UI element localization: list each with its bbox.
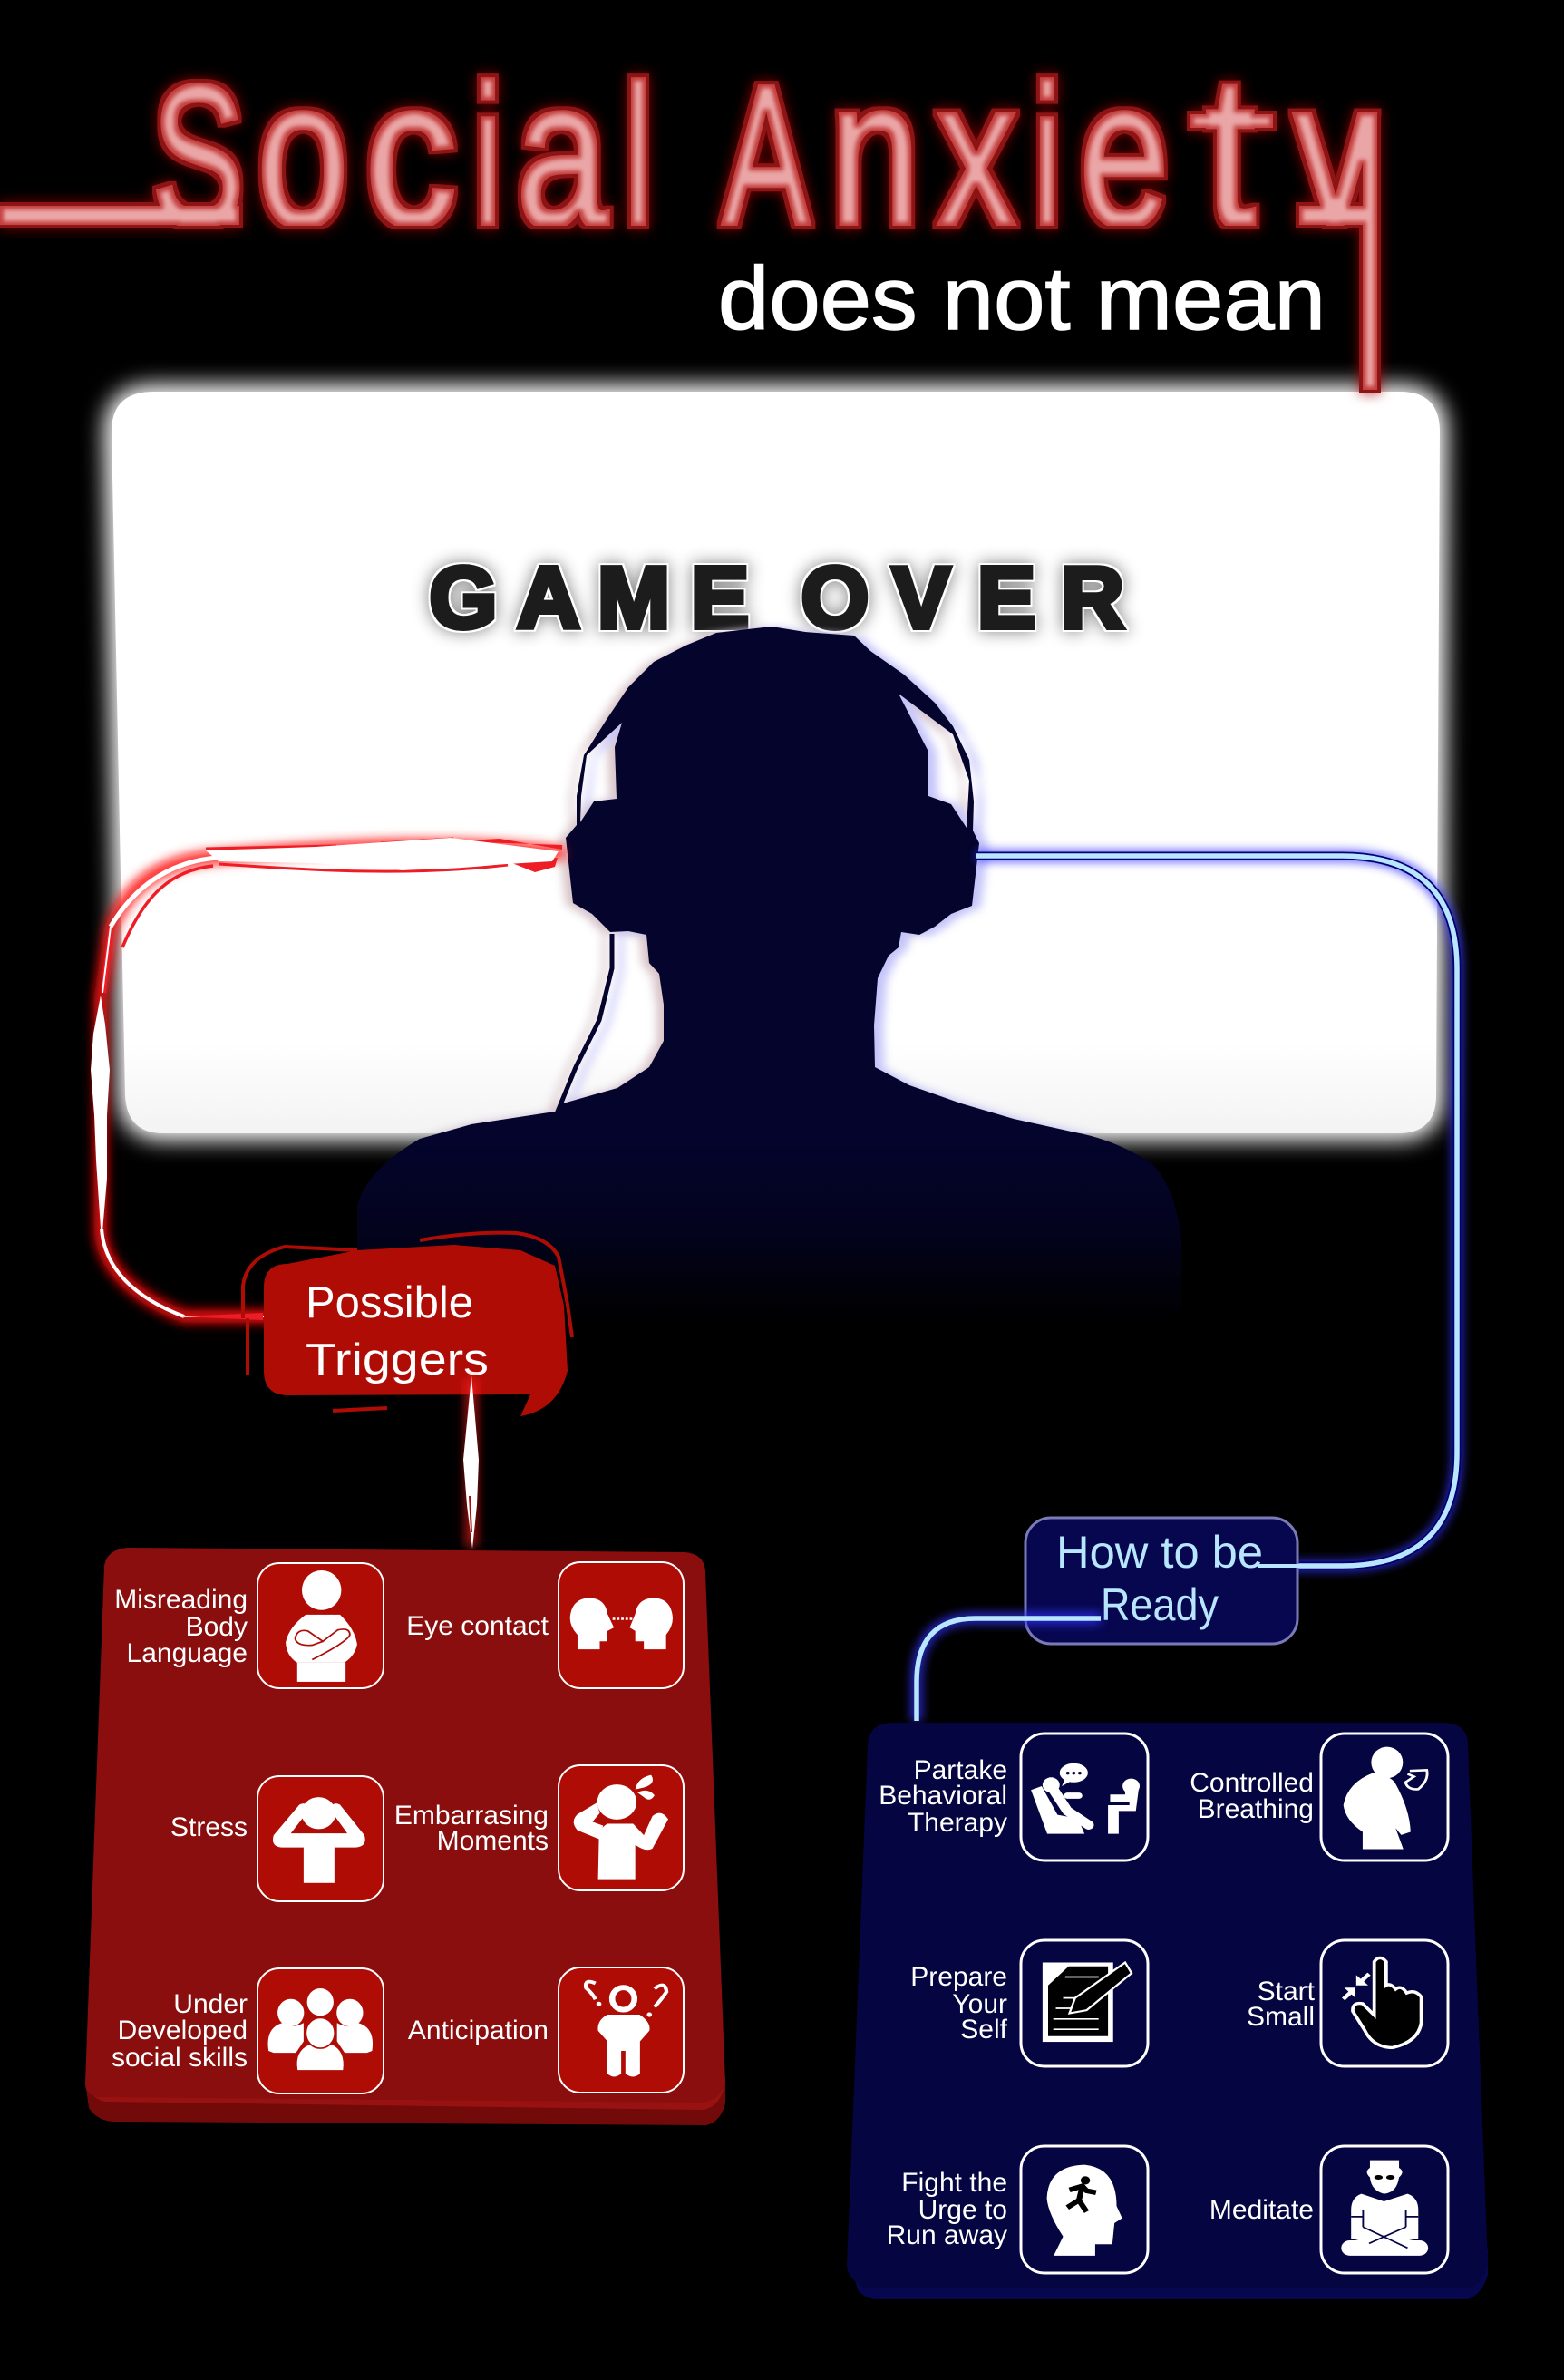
title: o [257,37,348,269]
title: y [1295,37,1375,269]
trigger: under developed social skills [112,1968,384,2093]
red connector: headphones to Possible Triggers [91,838,564,1320]
tip: prepare your self: Prepare [910,1962,1007,1992]
title: l [625,44,652,267]
panel: triggers [85,1548,725,2125]
panel: How to be Ready label: How to be [1056,1527,1263,1578]
tip: meditate [1209,2146,1448,2273]
trigger: misreading body language: Misreading [114,1585,248,1615]
tip: fight the urge to run away: Run away [887,2220,1007,2250]
tip: start small [1247,1940,1448,2066]
trigger: embarrassing moments: Moments [437,1826,549,1856]
panel: Possible Triggers label: Possible [306,1278,473,1327]
title: a [517,37,608,269]
tip: partake behavioral therapy: Behavioral [879,1781,1007,1811]
tip: start small: Small [1247,2002,1315,2032]
trigger: misreading body language [114,1563,384,1688]
panel lip highlight: triggers [85,2082,725,2110]
tip: prepare your self [910,1940,1148,2066]
panel lip: ready [847,2249,1488,2299]
title: S [152,44,244,267]
title: n [831,37,919,269]
tip: partake behavioral therapy: Partake [914,1755,1007,1785]
tip: controlled breathing: Breathing [1198,1794,1314,1824]
trigger: embarrassing moments: Embarrasing [394,1801,549,1831]
trigger: under developed social skills: social skills [112,2043,248,2073]
subtitle: does not mean [718,248,1326,348]
trigger: under developed social skills: Under [173,1989,248,2019]
trigger: under developed social skills: Developed [118,2016,248,2045]
blue connector: label to panel [917,1618,1101,1721]
trigger: misreading body language: Body [186,1612,248,1642]
tip: controlled breathing [1190,1734,1448,1860]
tip: controlled breathing: Controlled [1190,1768,1314,1798]
panel: How to be Ready label [1025,1518,1299,1644]
game over text: GAME OVER [430,549,1124,646]
tip: partake behavioral therapy [879,1734,1148,1860]
trigger: stress: Stress [170,1812,248,1842]
trigger: stress [170,1776,384,1901]
screen glow [112,392,1440,1133]
title: i [474,44,501,267]
trigger: eye contact [406,1562,684,1688]
tip: fight the urge to run away: Fight the [901,2168,1007,2198]
title: t [1206,32,1255,270]
tip: fight the urge to run away [887,2146,1148,2273]
title: x [937,37,1015,269]
blue connector: headphones to How to be Ready [976,856,1457,1566]
silhouette glow on screen [423,623,1101,1133]
panel face: ready [847,1723,1488,2288]
trigger: anticipation [408,1967,684,2093]
trigger: eye contact: Eye contact [406,1611,549,1641]
tip: meditate: Meditate [1209,2195,1314,2225]
trigger: anticipation: Anticipation [408,2016,549,2045]
panel: How to be Ready label: Ready [1101,1579,1219,1630]
title: c [365,37,456,269]
tip: start small: Start [1258,1977,1316,2006]
title: i [1034,44,1061,267]
title [0,32,1377,390]
panel lip: triggers [85,2078,725,2125]
tip: prepare your self: Self [960,2015,1008,2045]
panel face: triggers [85,1548,725,2103]
trigger: embarrassing moments [394,1765,684,1890]
panel: how to be ready [847,1723,1488,2299]
title: e [1080,37,1169,269]
silhouette with headphones [357,627,1181,1324]
title: A [723,44,810,267]
tip: partake behavioral therapy: Therapy [908,1808,1007,1838]
red connector: label to panel [463,1375,479,1549]
tip: prepare your self: Your [952,1989,1007,2019]
trigger: misreading body language: Language [127,1638,248,1668]
tip: fight the urge to run away: Urge to [918,2195,1007,2225]
panel: Possible Triggers label [243,1233,572,1416]
white screen [112,392,1440,1133]
panel: Possible Triggers label: Triggers [306,1336,489,1384]
